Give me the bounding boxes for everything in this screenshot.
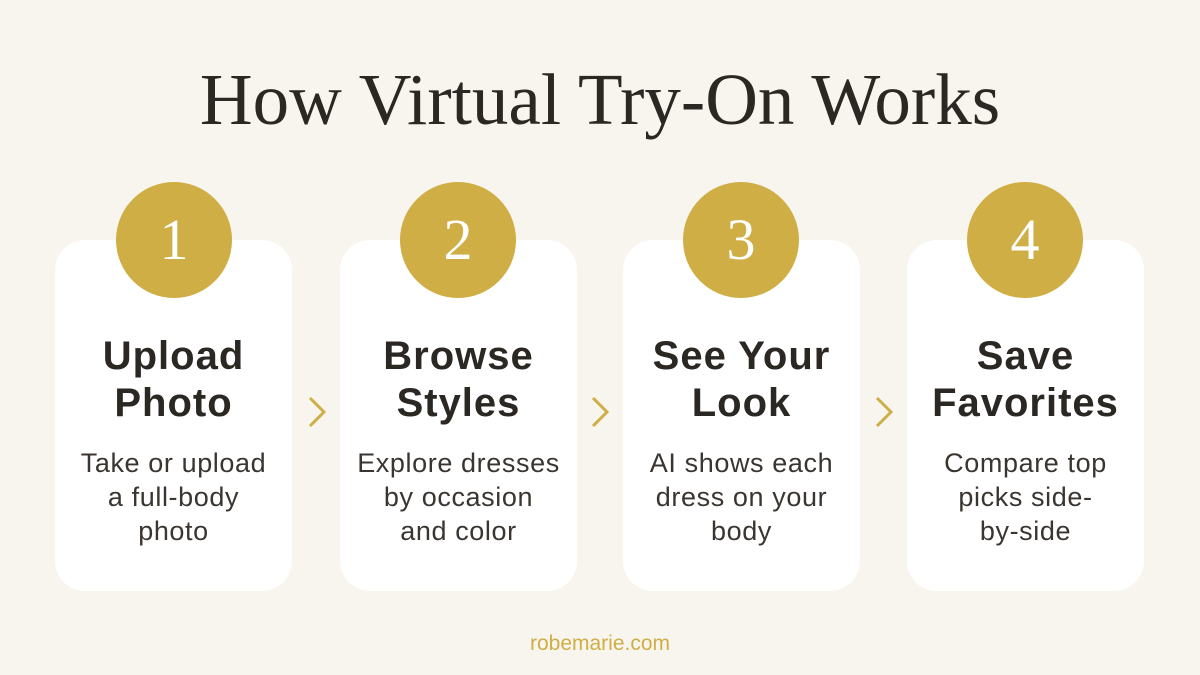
text 1 bbox=[81, 448, 266, 546]
text 3: dress on your bbox=[656, 482, 827, 512]
arrow 2 bbox=[592, 397, 609, 427]
text 1: a full-body bbox=[108, 482, 239, 512]
card 3 bbox=[623, 240, 860, 591]
text 3 bbox=[650, 448, 833, 546]
heading 3: Look bbox=[692, 381, 791, 425]
text 4 bbox=[944, 448, 1107, 546]
text 2: Explore dresses bbox=[357, 448, 560, 478]
badge 1: 1 bbox=[160, 207, 188, 272]
text 4: Compare top bbox=[944, 448, 1107, 478]
heading 1 bbox=[103, 334, 244, 425]
heading 4: Favorites bbox=[932, 381, 1119, 425]
card 2 bbox=[340, 240, 577, 591]
text 4: by-side bbox=[980, 516, 1071, 546]
badge 3: 3 bbox=[726, 207, 756, 272]
heading 2 bbox=[383, 334, 534, 425]
heading 4 bbox=[932, 334, 1119, 425]
footer: robemarie.com bbox=[530, 632, 670, 655]
text 2: and color bbox=[400, 516, 517, 546]
heading 3: See Your bbox=[653, 334, 830, 378]
card 4 bbox=[907, 240, 1144, 591]
badge 3 bbox=[683, 182, 799, 298]
text 3: body bbox=[711, 516, 772, 546]
heading 2: Styles bbox=[397, 381, 520, 425]
badge 2: 2 bbox=[444, 207, 472, 272]
card 1 bbox=[55, 240, 292, 591]
text 1: Take or upload bbox=[81, 448, 266, 478]
title: How Virtual Try-On Works bbox=[200, 59, 1000, 140]
arrow 1 bbox=[309, 397, 326, 427]
badge 2 bbox=[400, 182, 516, 298]
badge 1 bbox=[116, 182, 232, 298]
heading 3 bbox=[653, 334, 830, 425]
badge 4: 4 bbox=[1010, 207, 1040, 272]
heading 2: Browse bbox=[383, 334, 534, 378]
text 3: AI shows each bbox=[650, 448, 833, 478]
text 1: photo bbox=[138, 516, 209, 546]
text 2 bbox=[357, 448, 560, 546]
heading 1: Photo bbox=[114, 381, 233, 425]
badge 4 bbox=[967, 182, 1083, 298]
heading 4: Save bbox=[977, 334, 1074, 378]
text 2: by occasion bbox=[384, 482, 533, 512]
text 4: picks side- bbox=[958, 482, 1093, 512]
arrow 3 bbox=[876, 397, 893, 427]
heading 1: Upload bbox=[103, 334, 244, 378]
